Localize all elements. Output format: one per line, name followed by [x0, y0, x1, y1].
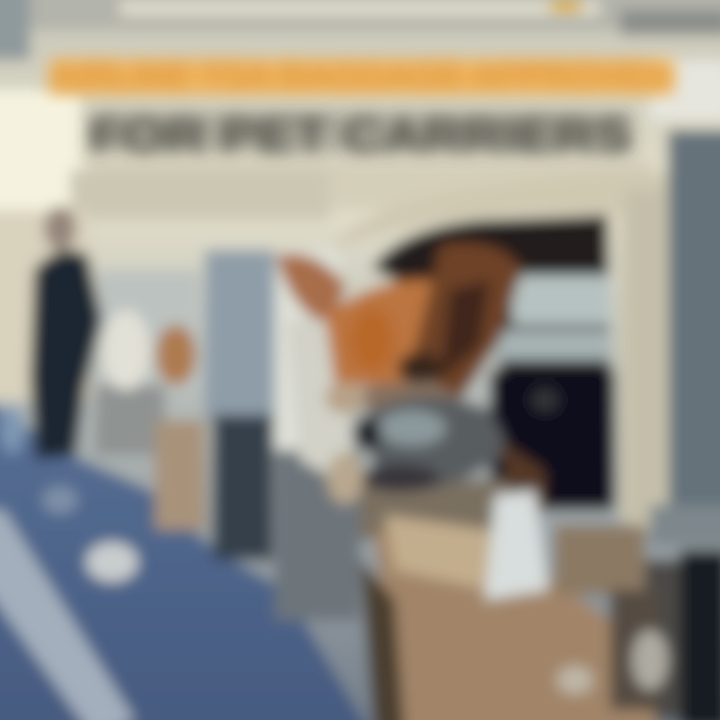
cabin wall and seats: [0, 210, 340, 460]
title line 2 band: [92, 112, 632, 152]
white chest side: [285, 320, 355, 490]
dark doorway interior: [372, 215, 615, 510]
title band: orange: [50, 60, 674, 94]
cabin ceiling: [0, 0, 720, 230]
person in aisle: [30, 206, 102, 460]
right ear dark: [410, 243, 522, 400]
dog: [276, 243, 545, 540]
orange head: [325, 279, 435, 385]
cardboard carrier: [360, 490, 668, 720]
left ear: [276, 254, 346, 328]
brown body below harness: [360, 480, 540, 540]
right bulkhead: [640, 130, 720, 720]
muzzle: [355, 382, 455, 414]
title line 1: AIRLINE TSA BAGGAGE APPROVED: [50, 55, 670, 96]
title: [50, 55, 674, 161]
distant seats and small carrier: [102, 310, 360, 620]
harness: [360, 397, 510, 490]
floor aisle: [0, 395, 375, 720]
overhead door frame: [330, 170, 672, 530]
title line 2: FOR PET CARRIERS: [89, 109, 631, 161]
